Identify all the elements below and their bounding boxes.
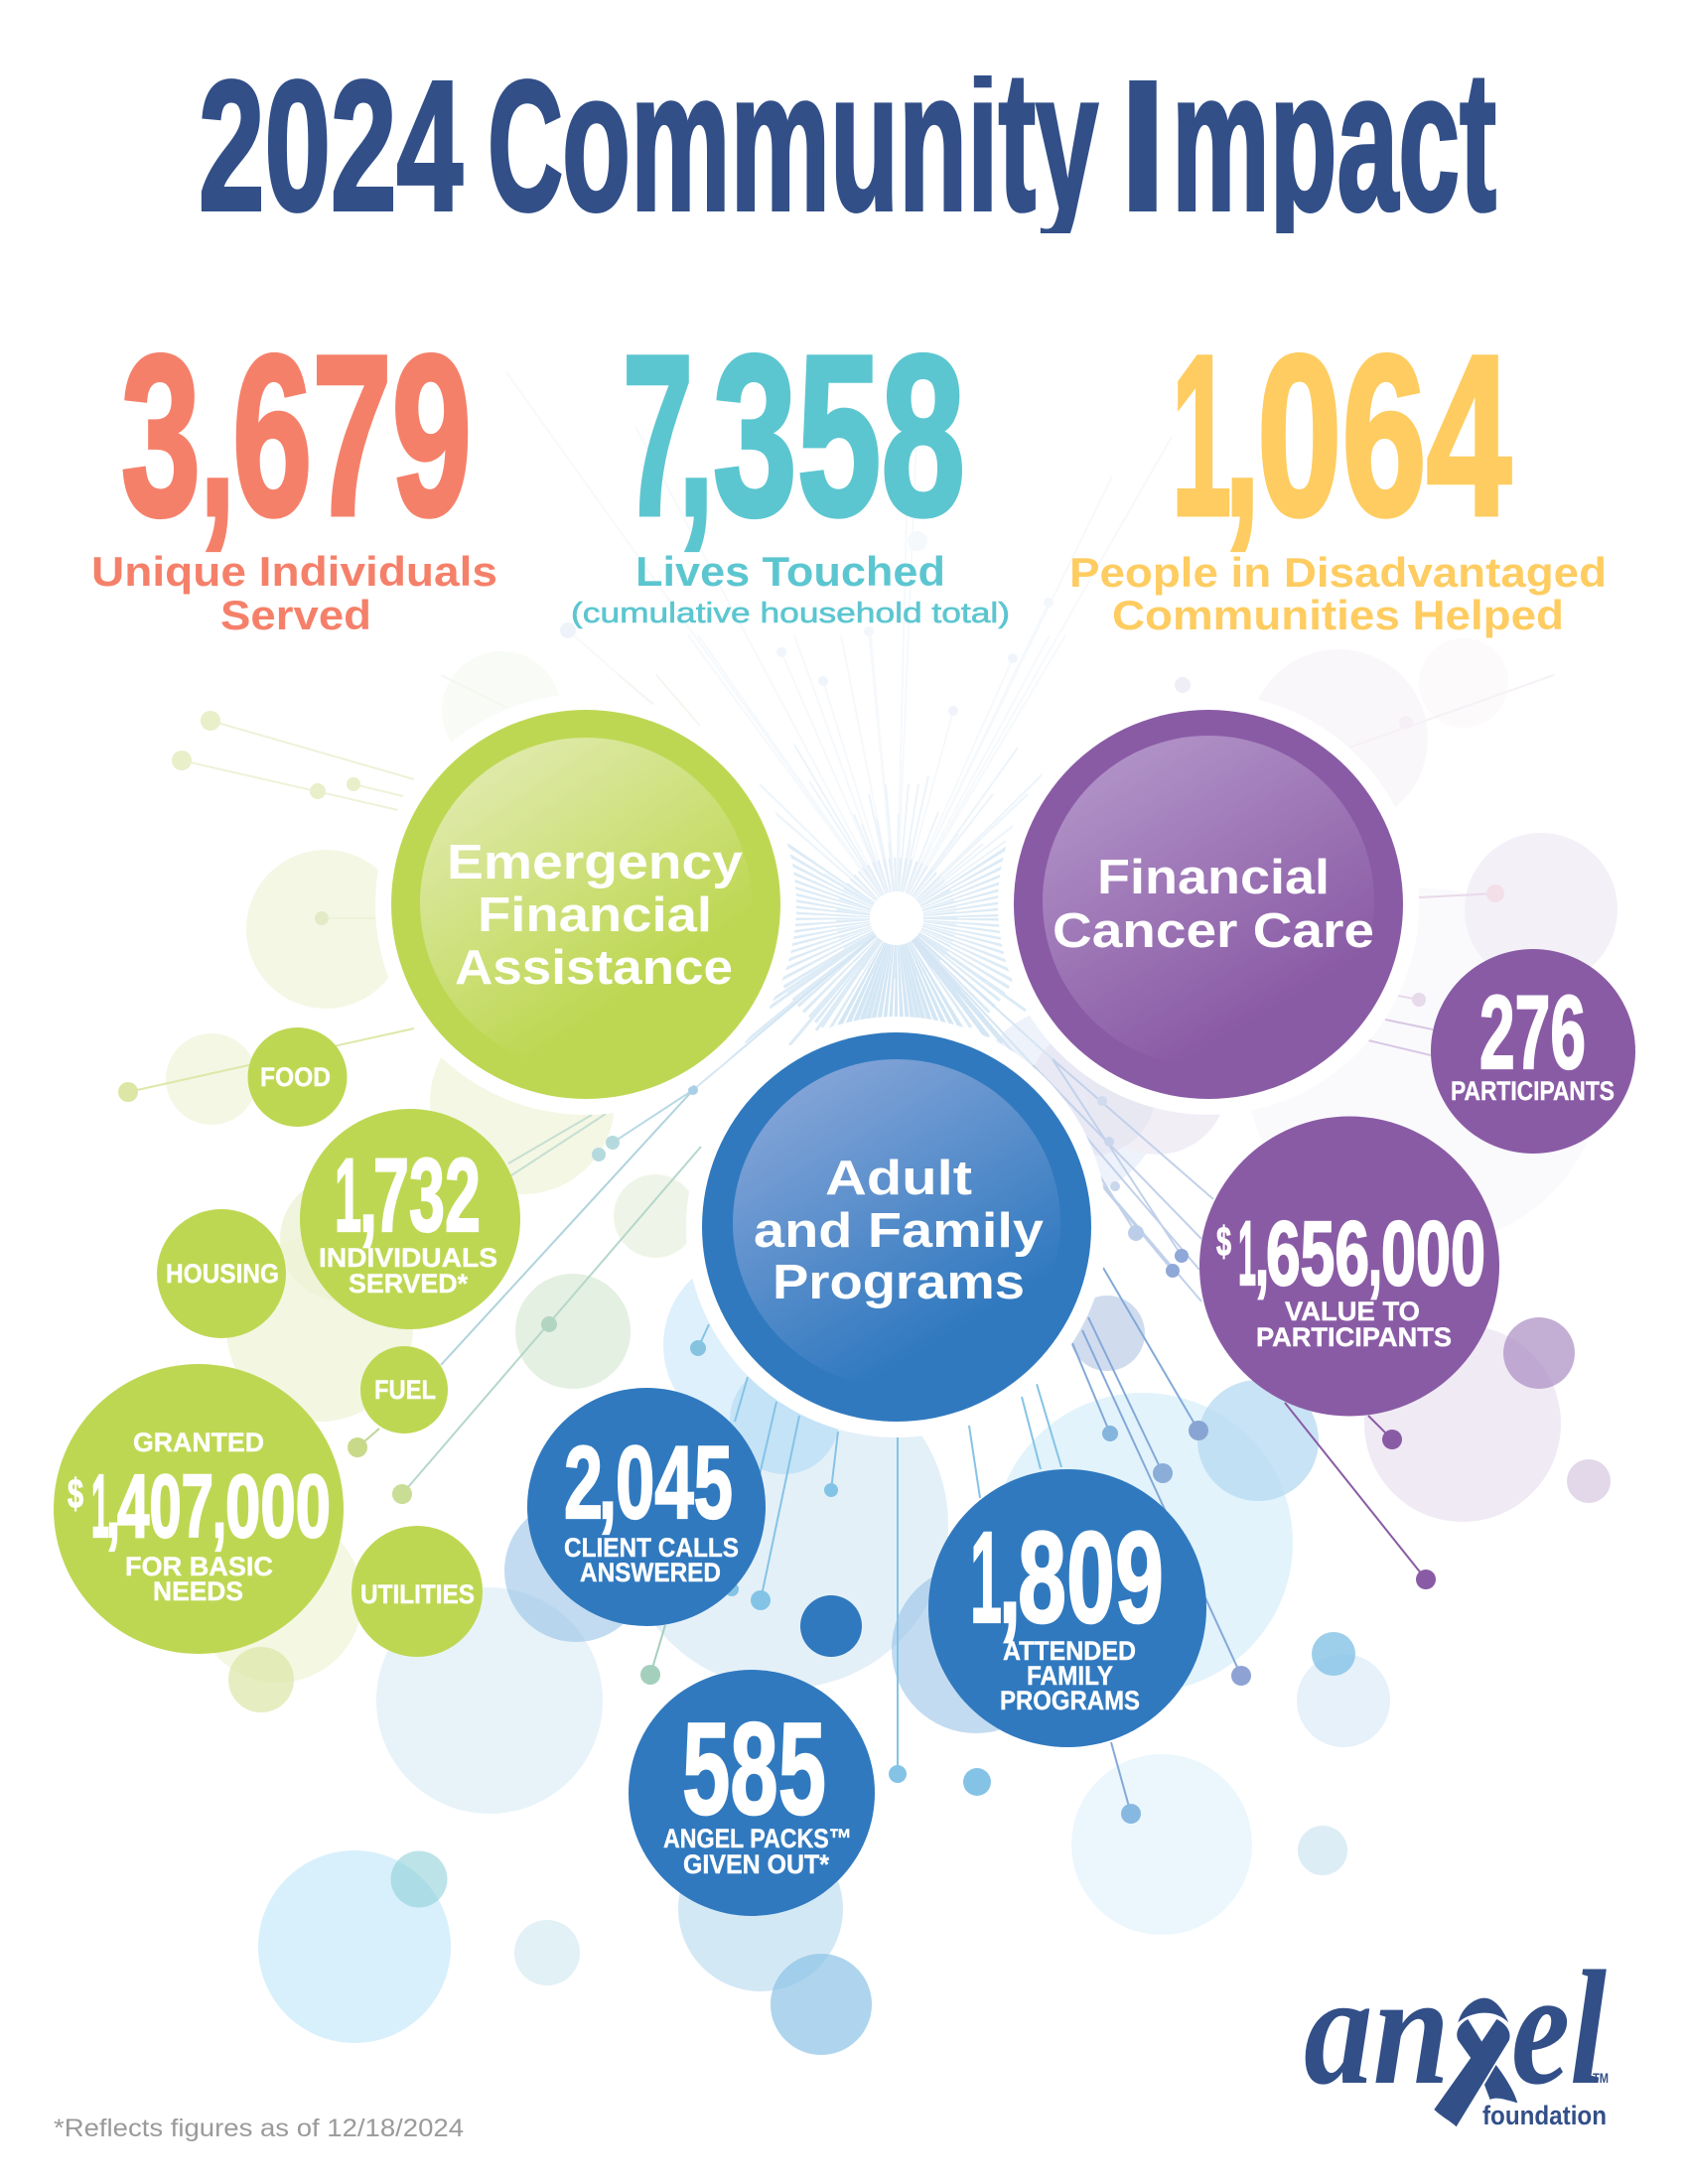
stat: 1,064 xyxy=(1069,308,1607,638)
callout: 1,732 individuals served: INDIVIDUALS xyxy=(319,1243,497,1273)
callout: food: FOOD xyxy=(260,1062,331,1092)
label: lives touched: Lives Touched xyxy=(635,548,945,595)
callout: 1,809 attended family programs xyxy=(928,1469,1206,1747)
logo: angel foundation: TM xyxy=(1593,2070,1609,2086)
callout: value to participants: , xyxy=(1255,1203,1269,1304)
label: unique individuals served: Served xyxy=(220,592,371,638)
title: I xyxy=(1120,44,1166,249)
stat: 3,679: 3 xyxy=(121,308,201,563)
callout: food xyxy=(248,1027,348,1127)
stat: 1,064: 064 xyxy=(1257,308,1511,563)
label: unique individuals served: Unique Individuals xyxy=(91,548,497,595)
callout: 1,809 attended family programs: , xyxy=(999,1504,1021,1650)
panel: financial cancer care xyxy=(998,694,1419,1115)
callout: value to participants: 1 xyxy=(1238,1203,1256,1304)
heading: emergency financial assistance xyxy=(447,836,743,995)
callout: 1,732 individuals served: 732 xyxy=(373,1138,481,1254)
logo: angel foundation: an xyxy=(1304,1941,1450,2117)
callout: granted for basic needs: 000 xyxy=(225,1457,331,1557)
callout: 1,809 attended family programs: ATTENDED xyxy=(1003,1636,1136,1666)
heading: emergency financial assistance: Emergency xyxy=(447,836,743,889)
callout: granted for basic needs: NEEDS xyxy=(153,1576,243,1606)
heading: emergency financial assistance: Financial xyxy=(478,888,712,942)
background bubbles xyxy=(166,638,1618,2055)
title: ommunity xyxy=(562,31,1098,252)
callout: granted for basic needs: 1 xyxy=(91,1457,109,1557)
callout: 1,732 individuals served: SERVED* xyxy=(349,1269,468,1298)
stat: 7,358 xyxy=(571,308,1010,629)
callout: 1,809 attended family programs: FAMILY xyxy=(1027,1661,1113,1691)
callout: 2,045 client calls answered: , xyxy=(599,1426,617,1541)
heading: adult and family programs: and Family xyxy=(754,1204,1044,1258)
callout: granted for basic needs: $ xyxy=(68,1470,83,1517)
callout: value to participants: , xyxy=(1368,1203,1382,1304)
callout: granted for basic needs: 407 xyxy=(117,1457,213,1557)
callout: utilities: UTILITIES xyxy=(360,1579,475,1609)
light burst rays xyxy=(506,372,1172,1045)
callout: 1,809 attended family programs: 809 xyxy=(1018,1504,1164,1650)
stat: 3,679 xyxy=(91,308,497,638)
stat: 7,358: , xyxy=(678,308,714,563)
title: C xyxy=(488,44,563,249)
callout: value to participants: VALUE TO xyxy=(1285,1297,1420,1326)
callout: 585 angel packs given out: GIVEN OUT* xyxy=(683,1849,829,1879)
callout: 1,809 attended family programs: 1 xyxy=(970,1504,1002,1650)
callout: 276 participants: 276 xyxy=(1479,975,1586,1091)
panel: adult and family programs xyxy=(686,1017,1107,1437)
icon: awareness ribbon xyxy=(1434,1998,1517,2126)
callout: 2,045 client calls answered: 045 xyxy=(616,1426,733,1541)
callout: 1,732 individuals served: , xyxy=(359,1138,377,1254)
callout: granted for basic needs: GRANTED xyxy=(133,1428,264,1457)
callout: 1,732 individuals served: 1 xyxy=(335,1138,361,1254)
callout: 2,045 client calls answered: 2 xyxy=(564,1426,603,1541)
label: unique individuals served xyxy=(91,548,497,638)
callout: housing: HOUSING xyxy=(166,1259,279,1289)
callout: fuel xyxy=(360,1346,448,1433)
callout: 585 angel packs given out: ANGEL PACKS™ xyxy=(663,1824,852,1853)
label: people in disadvantaged communities helped xyxy=(1069,549,1607,638)
callout: 2,045 client calls answered: CLIENT CALLS xyxy=(564,1533,739,1563)
label: lives touched xyxy=(571,548,1010,629)
logo: angel foundation: el xyxy=(1511,1937,1607,2118)
callout: 2,045 client calls answered: ANSWERED xyxy=(580,1558,721,1587)
heading: financial cancer care xyxy=(1053,851,1374,958)
callout: value to participants: PARTICIPANTS xyxy=(1256,1322,1452,1352)
callout: 585 angel packs given out: 585 xyxy=(682,1696,826,1842)
burst hub xyxy=(870,891,923,945)
stat: 3,679: 679 xyxy=(232,308,472,563)
label: people in disadvantaged communities helped: Communities Helped xyxy=(1112,592,1564,638)
heading: financial cancer care: Financial xyxy=(1097,851,1330,904)
callout: value to participants: 656 xyxy=(1266,1203,1369,1304)
footnote: *Reflects figures as of 12/18/2024 xyxy=(54,2115,464,2142)
callout: granted for basic needs: , xyxy=(106,1457,120,1557)
callout: value to participants xyxy=(1199,1116,1499,1416)
label: people in disadvantaged communities helped: People in Disadvantaged xyxy=(1069,549,1607,596)
callout: housing xyxy=(157,1209,286,1338)
panel: emergency financial assistance xyxy=(375,694,796,1115)
callout: 276 participants: PARTICIPANTS xyxy=(1451,1076,1615,1106)
callout: 2,045 client calls answered xyxy=(527,1388,766,1626)
callout: utilities xyxy=(352,1526,483,1657)
stat: 1,064: , xyxy=(1224,308,1260,563)
connector dots xyxy=(118,531,1504,1824)
stat: 1,064: 1 xyxy=(1172,308,1231,563)
callout: 1,809 attended family programs: PROGRAMS xyxy=(1000,1686,1140,1715)
connector lines xyxy=(128,675,1554,1814)
stat: 7,358: 7 xyxy=(623,308,693,563)
heading: adult and family programs: Programs xyxy=(773,1256,1025,1309)
logo: angel foundation xyxy=(1304,1937,1609,2130)
stat: 3,679: , xyxy=(200,308,235,563)
callout: value to participants: 000 xyxy=(1381,1203,1485,1304)
heading: adult and family programs: Adult xyxy=(825,1152,972,1205)
callout: 585 angel packs given out xyxy=(629,1670,875,1916)
callout: 276 participants xyxy=(1431,949,1635,1154)
callout: fuel: FUEL xyxy=(374,1375,436,1405)
heading: emergency financial assistance: Assistance xyxy=(455,941,733,995)
stat: 7,358: 358 xyxy=(713,308,965,563)
callout: value to participants: $ xyxy=(1216,1218,1231,1265)
callout: 1,732 individuals served xyxy=(300,1109,520,1329)
heading: financial cancer care: Cancer Care xyxy=(1053,904,1374,958)
title: 2024 xyxy=(199,44,463,249)
label: lives touched: (cumulative household total) xyxy=(571,598,1010,629)
callout: granted for basic needs: FOR BASIC xyxy=(125,1552,273,1581)
logo: angel foundation: foundation xyxy=(1482,2101,1607,2130)
callout: granted for basic needs: , xyxy=(212,1457,226,1557)
heading: adult and family programs xyxy=(754,1152,1044,1309)
callout: granted for basic needs xyxy=(54,1364,344,1654)
